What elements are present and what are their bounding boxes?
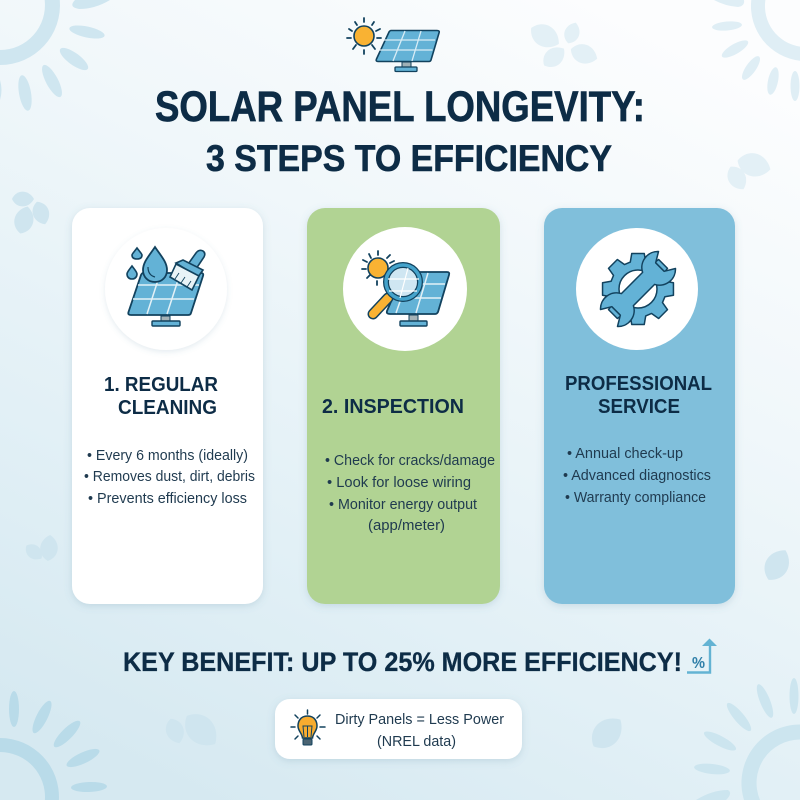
bullet list: • Every 6 months (ideally) [87,448,248,464]
heading: SERVICE [598,395,680,418]
bullet list: (app/meter) [368,518,445,534]
bullet list: • Warranty compliance [565,490,706,506]
heading [104,373,218,419]
heading: CLEANING [118,396,217,419]
panel: professional service [544,208,735,604]
decorative sun: bottom left [0,691,107,800]
bullet list: • Prevents efficiency loss [88,491,247,507]
bullet list: • Look for loose wiring [327,475,471,491]
bullet list: • Advanced diagnostics [563,468,711,484]
icon: sun and solar panel [347,18,439,72]
panel: inspection [307,208,500,604]
key benefit heading: KEY BENEFIT: UP TO 25% MORE EFFICIENCY! [123,647,682,677]
decorative sun: bottom right [694,678,800,800]
heading: PROFESSIONAL [565,372,712,395]
bullet list [563,446,711,506]
icon: gear and wrench [576,228,698,350]
heading [565,372,712,418]
bullet list: • Annual check-up [567,446,683,462]
callout text: Dirty Panels = Less Power [335,712,504,728]
bullet list: • Check for cracks/damage [325,453,495,469]
icon: cleaning [105,228,227,350]
bullet list [325,453,495,534]
heading: 2. INSPECTION [322,395,464,418]
callout: dirty panels [275,699,522,759]
bullet list [84,448,255,507]
callout text: (NREL data) [377,734,456,750]
icon: light bulb [291,710,325,745]
bullet list: • Monitor energy output [329,497,477,513]
decorative sun: top left [0,0,110,112]
icon: inspection [343,227,467,351]
bullet list: • Removes dust, dirt, debris [84,469,255,485]
heading: 1. REGULAR [104,373,218,396]
title: 3 STEPS TO EFFICIENCY [206,138,612,179]
title [155,83,645,179]
icon: percent with up arrow [687,638,717,672]
icon: percent with up arrow: % [692,655,705,672]
callout text [335,712,504,750]
title: SOLAR PANEL LONGEVITY: [155,83,645,131]
decorative sun: top right [712,0,800,101]
panel: regular cleaning [72,208,263,604]
